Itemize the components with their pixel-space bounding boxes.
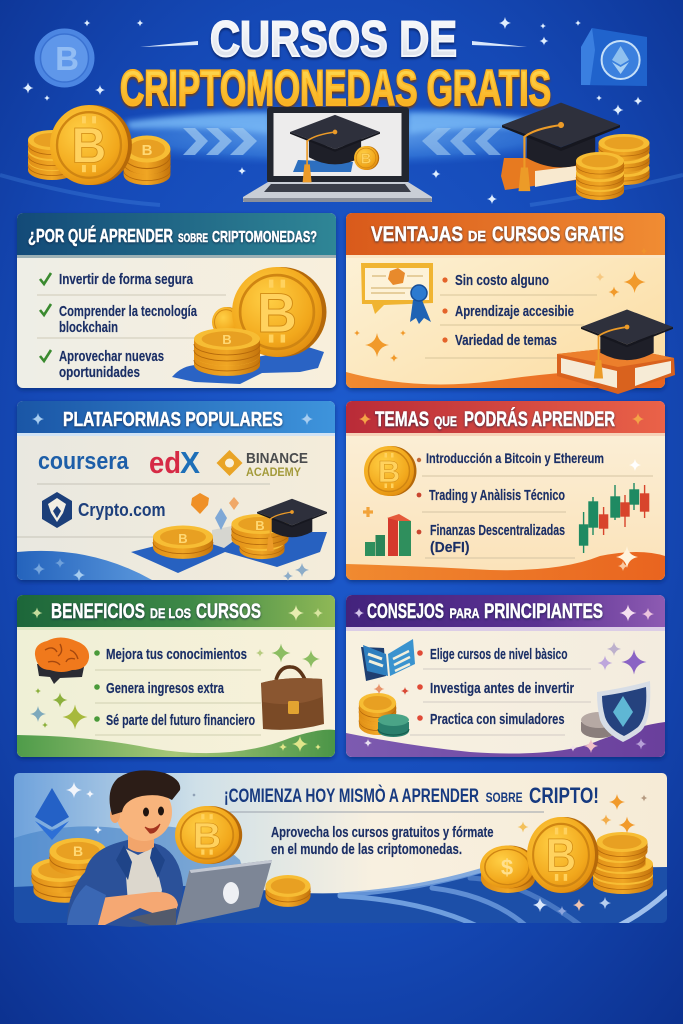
orange book xyxy=(501,158,590,190)
icon: open book xyxy=(361,639,415,681)
coin stack left: B xyxy=(73,843,83,859)
panel: consejos xyxy=(346,595,665,757)
dividers xyxy=(95,670,261,735)
coin near laptop xyxy=(266,875,310,907)
header and wave xyxy=(346,401,665,580)
coin: B xyxy=(378,454,400,489)
dividers xyxy=(410,669,591,735)
header and wave xyxy=(17,595,335,757)
coin on screen xyxy=(354,146,379,170)
card xyxy=(346,595,665,757)
heading: ¿POR QUÉ APRENDER xyxy=(28,225,173,246)
heading: SOBRE xyxy=(486,790,523,805)
person xyxy=(67,770,183,927)
right small stack xyxy=(124,136,170,185)
coin stack xyxy=(232,514,288,559)
light band behind hero xyxy=(0,103,683,205)
item: Finanzas Descentralizadas xyxy=(430,522,565,539)
item: Mejora tus conocimientos xyxy=(106,646,247,663)
cap xyxy=(502,103,620,191)
item xyxy=(417,646,568,663)
blocks and gems xyxy=(191,493,239,548)
body text xyxy=(271,824,494,858)
hero: laptop with graduation cap xyxy=(243,107,432,202)
item 1: Invertir de forma segura xyxy=(59,271,194,288)
cap xyxy=(581,310,673,379)
plus icon xyxy=(363,507,373,517)
big coin xyxy=(232,267,326,357)
heading: CURSOS xyxy=(196,600,261,623)
item xyxy=(417,487,565,504)
stack xyxy=(593,832,653,894)
arm and hand xyxy=(96,892,178,925)
logo: binance academy: ACADEMY xyxy=(246,465,301,479)
big coin: B xyxy=(72,119,106,174)
coin xyxy=(364,446,416,496)
item xyxy=(417,522,565,556)
ear xyxy=(110,807,120,823)
coin on screen: B xyxy=(361,151,372,167)
heading: CURSOS GRATIS xyxy=(492,223,624,246)
bar chart xyxy=(365,514,411,556)
item xyxy=(94,712,255,729)
dividers xyxy=(17,484,270,537)
logo: binance academy: BINANCE xyxy=(246,450,308,467)
shirt xyxy=(124,848,162,904)
logo: edX: ed xyxy=(149,445,181,480)
cap on screen xyxy=(290,115,380,182)
coin behind person: B xyxy=(193,816,221,856)
item: Genera ingresos extra xyxy=(106,680,224,697)
heading: CONSEJOS xyxy=(367,600,444,623)
heading: CRIPTO! xyxy=(529,783,599,808)
small coin: $ xyxy=(501,855,513,880)
card xyxy=(17,213,336,388)
heading: DE xyxy=(468,228,486,245)
header and wave xyxy=(346,213,665,388)
check list xyxy=(40,271,197,381)
dividers xyxy=(422,476,653,558)
icon: briefcase xyxy=(261,667,324,730)
logo: crypto.com: Crypto.com xyxy=(78,500,166,520)
item 2 xyxy=(40,303,197,336)
item 3: oportunidades xyxy=(59,364,140,381)
laptop xyxy=(128,860,272,925)
heading: SOBRE xyxy=(178,231,208,245)
hero: cap, book and coins right xyxy=(501,103,650,200)
sparkles: header xyxy=(22,17,642,204)
panel: ventajas xyxy=(346,213,675,394)
coin stack xyxy=(194,328,260,376)
item: Variedad de temas xyxy=(455,332,557,349)
panel: beneficios xyxy=(17,595,335,757)
laptop screen xyxy=(267,107,409,183)
coin back xyxy=(212,307,241,337)
item: Trading y Anàlisis Técnico xyxy=(429,487,565,504)
right small stack: B xyxy=(142,142,153,159)
header band xyxy=(17,213,336,258)
icon: gray coin xyxy=(581,712,617,738)
icon: coins xyxy=(359,693,409,737)
sleeve xyxy=(67,885,106,925)
panel: plataformas xyxy=(17,401,335,581)
icon: ethereum cube xyxy=(581,28,647,86)
right coins xyxy=(480,817,653,894)
panel: por qué aprender xyxy=(17,213,336,388)
item 3: Aprovechar nuevas xyxy=(59,348,164,365)
heading: TEMAS xyxy=(375,408,429,431)
book on screen xyxy=(293,160,353,172)
item: Aprendizaje accesibie xyxy=(455,303,574,320)
coin stack: B xyxy=(255,518,265,533)
logo: coursera: coursera xyxy=(38,448,129,475)
title xyxy=(120,11,551,116)
coin flat: B xyxy=(178,531,188,546)
stars xyxy=(359,413,644,571)
item: (DeFI) xyxy=(430,539,470,556)
laptop base xyxy=(243,182,432,202)
small coin xyxy=(480,846,537,893)
list xyxy=(94,646,255,729)
neck xyxy=(128,835,154,852)
icon: brain xyxy=(35,638,89,684)
list xyxy=(417,646,574,728)
item: Elige cursos de nivel bàsico xyxy=(430,646,568,663)
heading: DE LOS xyxy=(150,605,191,621)
header and wave xyxy=(346,595,665,757)
sparkles xyxy=(518,794,648,916)
item 2: blockchain xyxy=(59,319,118,336)
big coin xyxy=(527,817,598,893)
item xyxy=(94,680,224,697)
big coin: B xyxy=(257,281,297,344)
hero: chevrons left xyxy=(183,128,257,155)
heading: ¡COMIENZA HOY MISMÒ A APRENDER xyxy=(224,785,479,807)
big coin xyxy=(50,105,132,185)
heading: PODRÁS APRENDER xyxy=(464,408,615,431)
heading: VENTAJAS xyxy=(371,223,463,246)
icon: ethereum xyxy=(35,788,69,840)
cap xyxy=(257,499,327,551)
icon: blue bitcoin coin: B xyxy=(55,40,79,77)
item xyxy=(417,711,564,728)
hero: gold coins left xyxy=(28,105,170,185)
item 3 xyxy=(40,348,164,381)
stars xyxy=(354,248,648,362)
panel: call to action xyxy=(14,770,667,927)
card and scene xyxy=(14,773,667,925)
body xyxy=(67,838,183,927)
face xyxy=(116,783,172,841)
divider xyxy=(226,811,544,813)
icon: shield xyxy=(597,681,650,742)
left sparkles xyxy=(66,782,196,834)
blue splash xyxy=(172,347,324,384)
stars xyxy=(32,413,313,581)
item: Sin costo alguno xyxy=(455,272,549,289)
header and wave xyxy=(17,401,335,580)
title side flourishes xyxy=(140,41,527,47)
line 1: Aprovecha los cursos gratuitos y fórmate xyxy=(271,824,494,841)
item 2: Comprender la tecnología xyxy=(59,303,197,320)
coin stacks xyxy=(576,134,650,200)
item: Introducción a Bitcoin y Ethereum xyxy=(426,450,604,466)
candlestick chart xyxy=(580,483,649,553)
book xyxy=(557,347,675,394)
blue platform xyxy=(131,532,327,573)
item: Investiga antes de invertir xyxy=(430,680,574,697)
sparkles xyxy=(354,604,654,753)
card xyxy=(17,595,335,757)
list xyxy=(417,450,604,556)
title line 1: CURSOS DE xyxy=(210,11,457,67)
hero: chevrons right xyxy=(422,128,501,155)
item: Sé parte del futuro financiero xyxy=(106,712,255,729)
logo: edX: X xyxy=(180,445,200,480)
heading: BENEFICIOS xyxy=(51,600,145,623)
heading: PRINCIPIANTES xyxy=(484,600,603,623)
hair xyxy=(110,770,180,815)
panel: temas xyxy=(346,401,665,580)
logo: crypto.com xyxy=(42,492,166,528)
dividers xyxy=(425,295,597,358)
coin behind person xyxy=(175,806,242,864)
card xyxy=(17,401,335,580)
certificate xyxy=(361,263,433,324)
coin stack behind xyxy=(28,130,76,180)
heading: QUE xyxy=(434,413,457,429)
heading: PLATAFORMAS POPULARES xyxy=(63,409,283,431)
icon: blue bitcoin coin xyxy=(34,28,94,88)
card xyxy=(346,213,665,388)
item: Practica con simuladores xyxy=(430,711,564,728)
list xyxy=(442,272,574,349)
dividers xyxy=(37,295,226,338)
heading: CRIPTOMONEDAS? xyxy=(212,229,317,246)
sparkles xyxy=(30,605,323,752)
line 2: en el mundo de las criptomonedas. xyxy=(271,841,462,858)
big coin: B xyxy=(546,831,576,882)
eyes xyxy=(143,806,164,816)
coin stack left xyxy=(31,838,106,903)
jacket collar xyxy=(116,843,165,880)
card xyxy=(346,401,665,580)
coin flat xyxy=(153,526,213,559)
heading: PARA xyxy=(450,605,480,621)
logo: binance academy xyxy=(216,450,308,479)
coin stack: B xyxy=(222,332,232,347)
smile xyxy=(145,824,160,833)
